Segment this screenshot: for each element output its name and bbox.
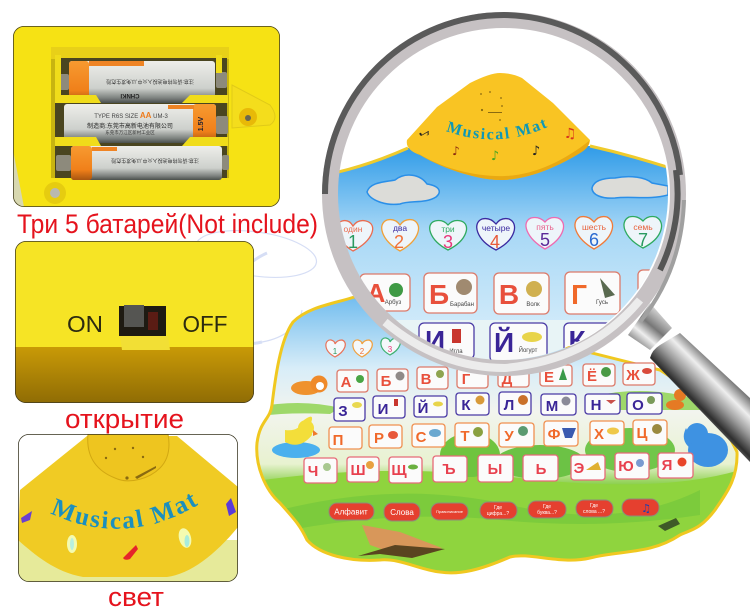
ON label: ON [67, 311, 103, 337]
battery 3 [71, 146, 222, 180]
alphabet row 4: Я [662, 457, 672, 474]
small number hearts: 3 [388, 345, 393, 354]
mode buttons: ♫ [641, 502, 651, 515]
mode buttons: буква...? [537, 510, 557, 516]
magnified tiles row 1: А [367, 278, 386, 308]
magnifier lens view [338, 73, 668, 360]
alphabet row 4 [304, 453, 693, 483]
mode buttons: Алфавит [334, 508, 368, 516]
lower row backdrop [396, 320, 610, 359]
magnified tiles row 1: Б [429, 279, 449, 310]
number hearts: 5 [540, 230, 550, 250]
alphabet row 4: Ю [618, 458, 634, 475]
LED lights [21, 498, 236, 560]
mode buttons: Правописание [436, 509, 464, 514]
battery 2 [64, 104, 216, 143]
alphabet row 4: Э [574, 460, 585, 477]
mode buttons: цифра...? [487, 511, 509, 517]
battery 2: 制造商:东莞市高新电池有限公司 [87, 122, 173, 130]
magnified tiles row 1: В [499, 279, 519, 310]
alphabet row 4: Ч [308, 463, 318, 480]
caption: light: свет [108, 582, 164, 612]
magnifier handle [628, 303, 750, 462]
number hearts: 3 [443, 232, 453, 252]
magnified tiles row 2 [419, 323, 614, 362]
alphabet row 3: Х [594, 426, 604, 443]
magnified tiles row 1: Волк [526, 302, 540, 308]
battery 2: 东莞市万江区新村工业区 [105, 129, 155, 136]
alphabet row 1: Г [462, 371, 471, 388]
battery 1 [69, 61, 215, 103]
alphabet row 4: Ш [350, 462, 366, 479]
battery springs [55, 72, 229, 171]
alphabet row 2: З [338, 403, 348, 420]
number hearts: 7 [638, 230, 648, 250]
alphabet row 3: Р [374, 430, 384, 447]
cloud left [367, 175, 439, 204]
alphabet row 1: Е [544, 369, 554, 386]
icon: dog [291, 376, 328, 395]
magnified tiles row 1 [360, 270, 678, 314]
panel: battery compartment [13, 26, 280, 207]
number hearts: четыре [482, 223, 510, 233]
alphabet row 1 [337, 363, 655, 392]
alphabet row 4: Ъ [442, 461, 456, 478]
alphabet row 2: О [632, 397, 644, 414]
small number hearts [326, 338, 400, 357]
alphabet row 4: Ы [488, 461, 502, 478]
number hearts: 1 [348, 232, 358, 252]
alphabet row 3: С [416, 429, 427, 446]
OFF label: OFF [182, 311, 228, 337]
alphabet row 2: Й [418, 399, 428, 417]
alphabet row 2: М [546, 398, 558, 415]
compartment recess [51, 47, 229, 178]
icon: elephant [684, 423, 728, 467]
battery 1: 注意:请勿将电池投入火中,以免发生危险 [106, 78, 194, 85]
alphabet row 3 [329, 420, 667, 449]
magnified tiles row 2: И [425, 325, 445, 356]
panel: power switch [15, 241, 254, 403]
number hearts: пять [536, 222, 554, 232]
music notes: ♪ [452, 144, 460, 158]
magnifier ring [325, 15, 684, 368]
music notes: ♪ [491, 149, 499, 164]
alphabet row 1: Ё [587, 368, 597, 385]
magnified sky [330, 146, 670, 360]
battery 3: 注意:请勿将电池投入火中,以免发生危险 [111, 157, 199, 164]
alphabet row 1: Б [381, 373, 392, 390]
alphabet row 1: А [341, 374, 352, 391]
music notes: ♪ [532, 144, 540, 159]
battery 1: CHNKI [120, 92, 140, 98]
mode buttons: слова ...? [583, 509, 605, 515]
battery 2: 1.5V [198, 116, 205, 131]
alphabet row 3: У [504, 428, 514, 445]
alphabet row 3: Т [460, 428, 470, 445]
cloud right [592, 177, 668, 198]
alphabet row 2: К [461, 397, 471, 414]
pond [272, 442, 320, 458]
magnified tiles row 2: Й [494, 326, 514, 358]
meadow and trees [250, 391, 740, 580]
screw [44, 182, 66, 204]
small number hearts: 2 [360, 347, 365, 356]
alphabet row 4: Ь [536, 461, 547, 478]
alphabet row 1: В [421, 371, 432, 388]
number hearts: один [344, 224, 363, 234]
music notes: ♫ [564, 126, 576, 142]
number hearts [336, 216, 662, 252]
mode buttons: Где [543, 504, 551, 510]
alphabet row 2 [334, 392, 662, 421]
magnified tiles row 1: Г [571, 279, 587, 310]
alphabet row 2: Н [591, 397, 601, 414]
alphabet row 3: Ц [637, 425, 648, 442]
number hearts: 6 [589, 230, 599, 250]
music notes: ♪ [415, 127, 432, 142]
magnified tiles row 2: К [568, 325, 586, 356]
alphabet row 2: Л [504, 397, 514, 414]
music notes [419, 128, 574, 160]
alphabet row 1: Д [502, 371, 513, 388]
caption: switch: открытие [65, 404, 184, 434]
number hearts: два [393, 223, 407, 233]
alphabet row 4: Щ [391, 462, 407, 479]
magnified tiles row 1: Барабан [450, 302, 474, 308]
number hearts: шесть [582, 222, 607, 232]
number hearts: семь [633, 222, 653, 232]
play mat [250, 290, 750, 580]
panel: musical mat lights [18, 434, 238, 582]
screw tab [232, 85, 275, 128]
yellow separators [55, 55, 228, 146]
number hearts: 4 [490, 232, 500, 252]
small number hearts: 1 [333, 347, 338, 356]
icon: duck [285, 417, 318, 445]
alphabet row 2: И [378, 401, 388, 418]
mode buttons: Слова [390, 508, 414, 517]
mode buttons: Где [494, 505, 502, 511]
magnified tiles row 2: Игла [449, 349, 463, 355]
mode buttons: Где [590, 503, 598, 509]
Musical Mat lettering: Musical Mat [446, 120, 548, 140]
watermark swirl [193, 224, 319, 344]
Musical Mat lettering: Musical Mat [50, 494, 198, 529]
speaker [88, 434, 169, 481]
magnified tiles row 1: Гусь [596, 300, 608, 306]
alphabet row 3: Ф [548, 426, 561, 443]
number hearts: 2 [394, 232, 404, 252]
alphabet row 1: Ж [625, 367, 640, 384]
icon: monkey [666, 389, 686, 410]
alphabet row 3: П [333, 432, 343, 449]
number hearts: три [441, 224, 455, 234]
magnified tiles row 2: Йогурт [519, 346, 538, 354]
battery 2: TYPE R6S SIZE AA UM-3 [94, 111, 168, 120]
mode buttons [329, 499, 659, 521]
magnified tiles row 1: Арбуз [385, 300, 401, 306]
caption: batteries: Три 5 батарей(Not include) [17, 209, 318, 239]
slide switch [119, 305, 170, 350]
speaker unit [406, 73, 590, 180]
